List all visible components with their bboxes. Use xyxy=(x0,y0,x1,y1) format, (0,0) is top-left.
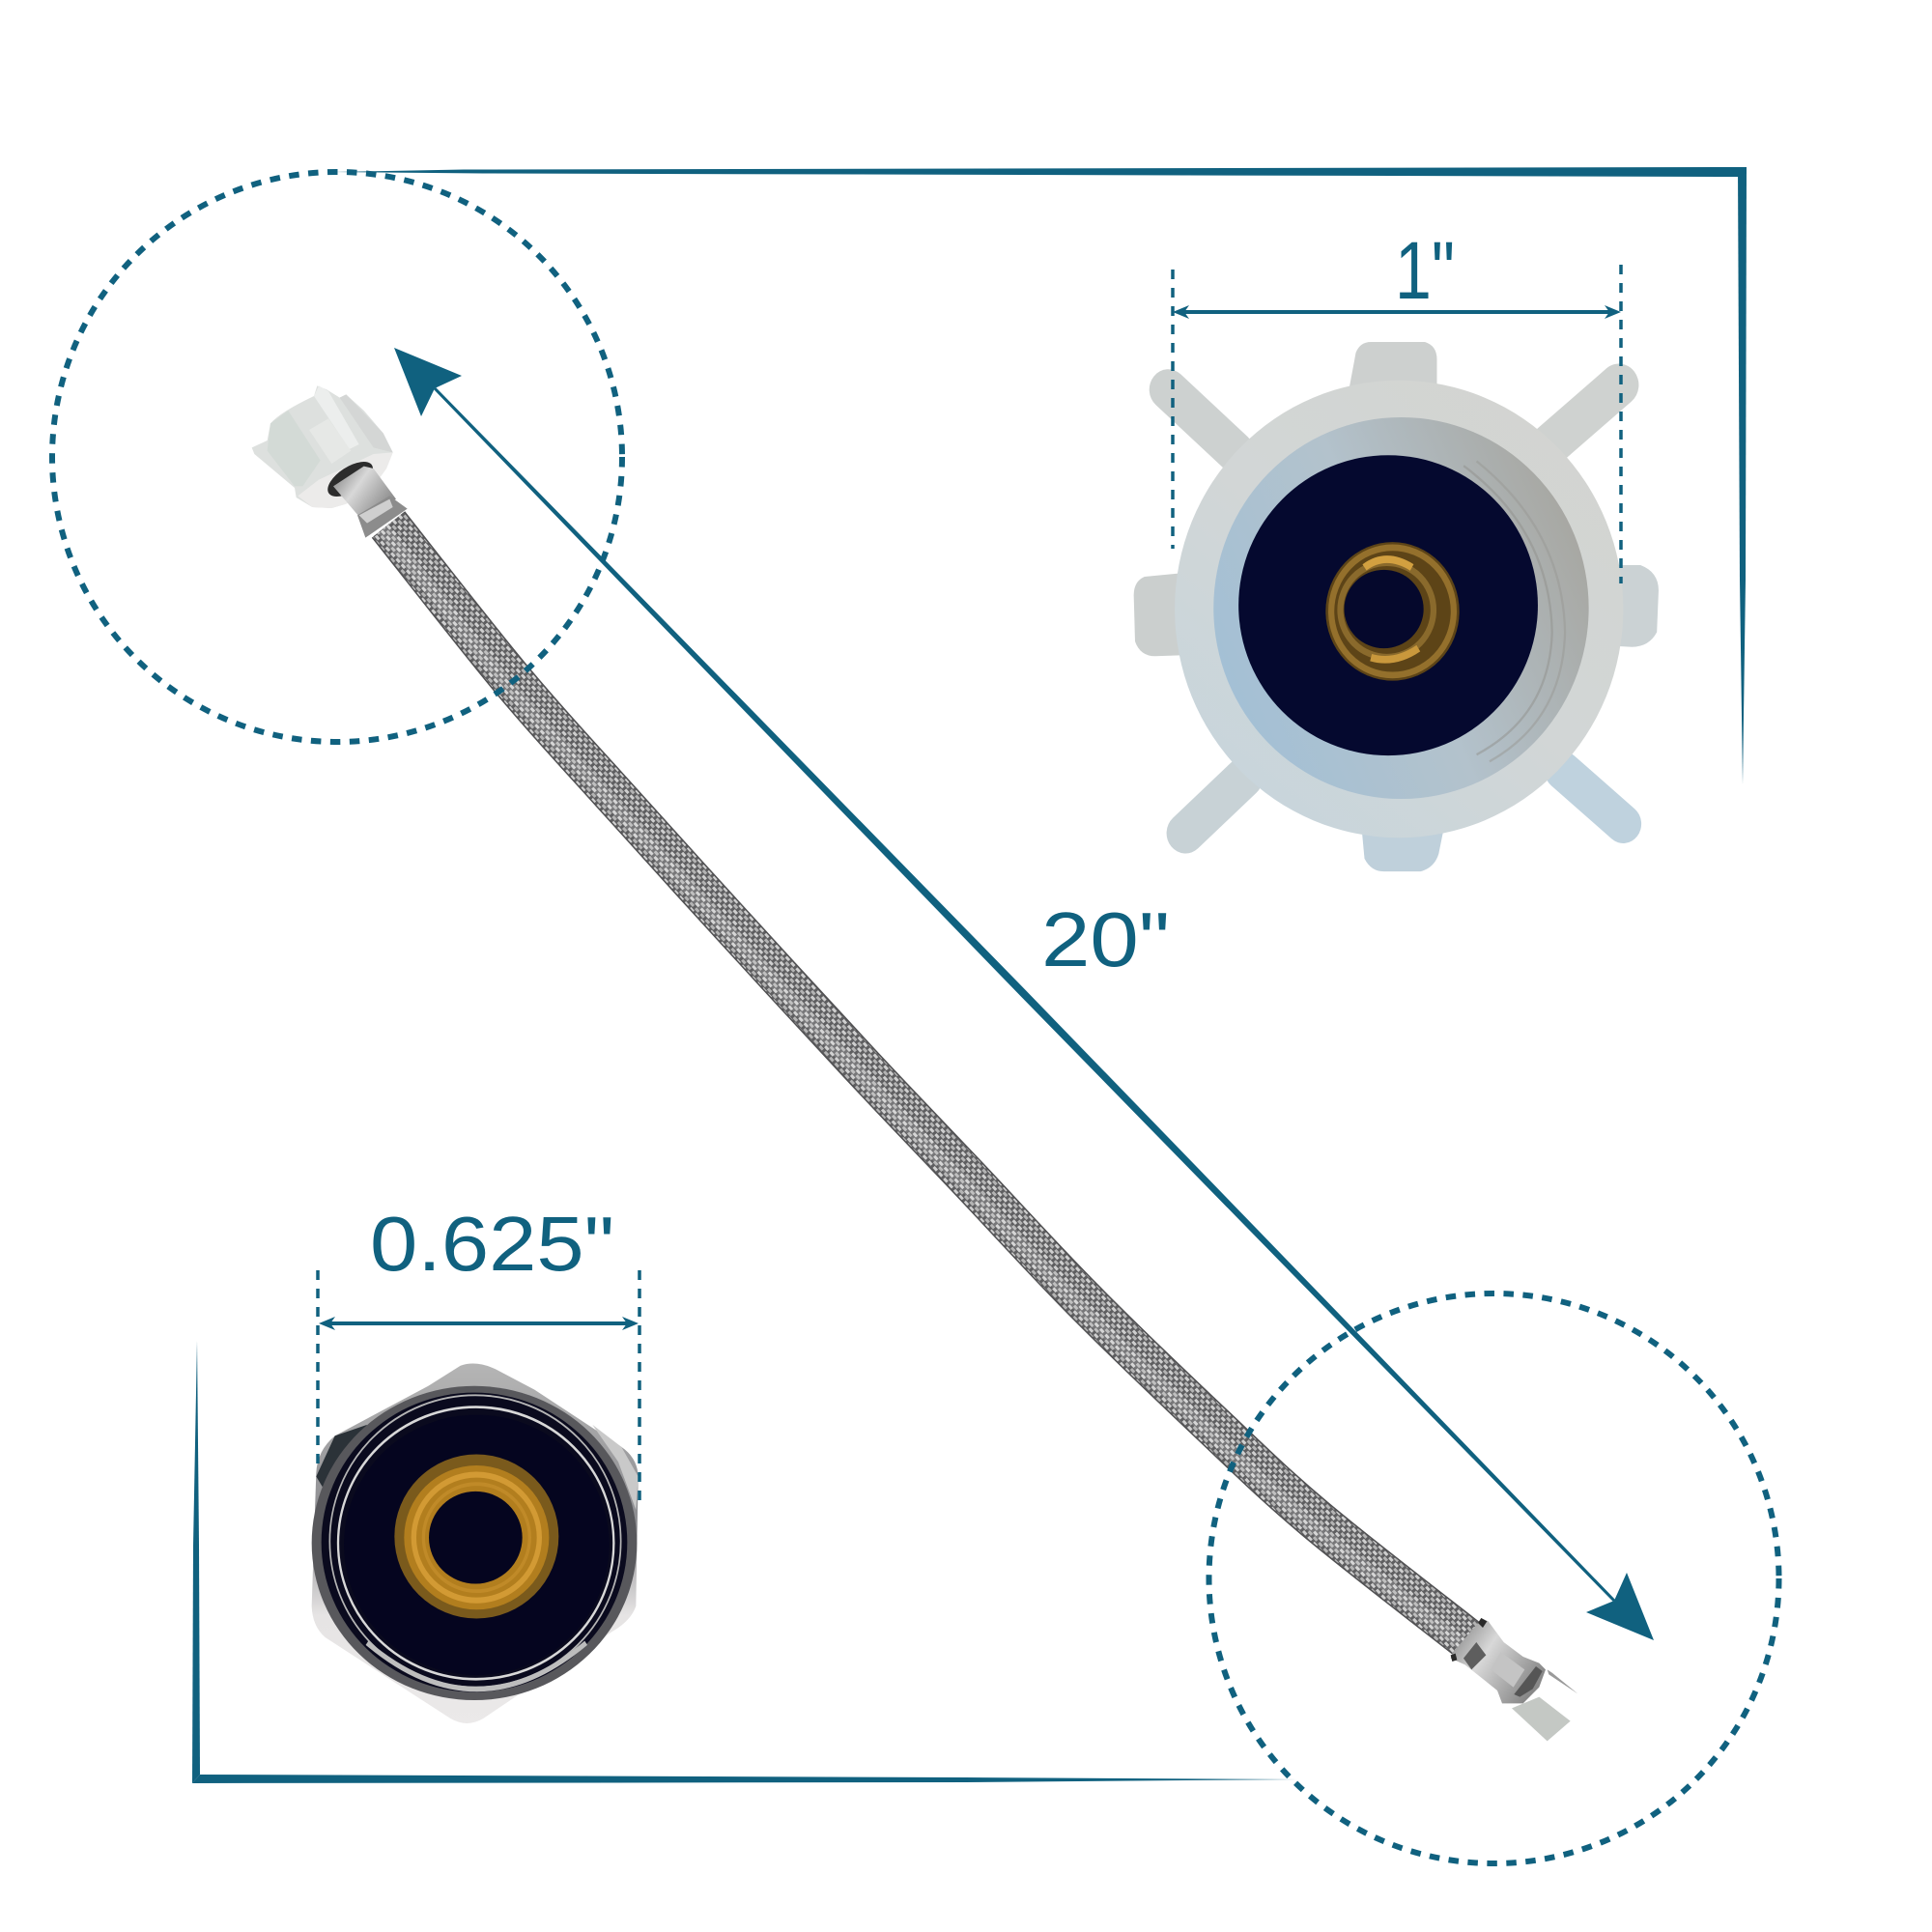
double arrow xyxy=(1173,305,1621,319)
brass fitting xyxy=(1325,542,1460,681)
nut threaded inner wall xyxy=(1213,417,1589,799)
hex body xyxy=(312,1364,639,1723)
label: 1 inch: 1" xyxy=(1395,225,1455,316)
rim rings xyxy=(312,1386,637,1700)
frame: top and right border xyxy=(333,167,1747,784)
hose end: white plastic nut, side view xyxy=(252,385,408,538)
brass seat xyxy=(394,1455,558,1618)
extension lines xyxy=(318,1270,639,1506)
dimension: 1 inch xyxy=(1173,225,1621,583)
nut outer ring xyxy=(1175,381,1623,838)
frame: left and bottom border xyxy=(192,1341,1297,1783)
metal hex nut, end view xyxy=(312,1364,639,1723)
dashed callout circle: top left xyxy=(52,172,622,742)
label: 20 inch: 20" xyxy=(1041,896,1170,982)
nut fins xyxy=(1134,342,1659,871)
dimension: 0.625 inch xyxy=(318,1201,639,1506)
length arrow: 20 inch diagonal xyxy=(394,348,1654,1640)
extension lines xyxy=(1173,265,1621,583)
braided steel hose xyxy=(252,385,1577,1741)
hose end: crimped collar and tail xyxy=(1451,1618,1577,1741)
white plastic nut, end view xyxy=(1134,342,1659,871)
hose body xyxy=(384,525,1467,1644)
nut dark interior xyxy=(1238,455,1538,755)
label: 0.625 inch: 0.625" xyxy=(370,1201,614,1287)
dark interior xyxy=(344,1415,610,1675)
double arrow xyxy=(319,1317,639,1330)
dashed callout circle: bottom right xyxy=(1209,1293,1779,1863)
